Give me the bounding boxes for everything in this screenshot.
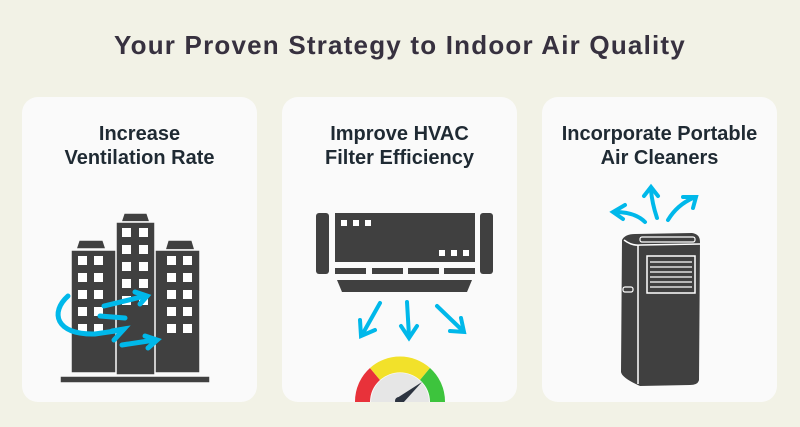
heading: ventilation: Increase xyxy=(99,123,180,145)
panel: portable air cleaners xyxy=(542,97,777,402)
heading: air cleaners xyxy=(562,123,757,169)
heading: air cleaners: Air Cleaners xyxy=(601,147,718,169)
panel: HVAC filter xyxy=(282,97,517,402)
heading: ventilation: Ventilation Rate xyxy=(64,147,215,169)
heading: air cleaners: Incorporate Portable xyxy=(562,123,757,145)
heading: HVAC: Filter Efficiency xyxy=(325,147,474,169)
panel: ventilation xyxy=(22,97,257,402)
heading: HVAC: Improve HVAC xyxy=(330,123,469,145)
heading: ventilation xyxy=(64,123,215,169)
icon: AC unit with arrows and gauge xyxy=(316,213,493,402)
icon: buildings with airflow arrows xyxy=(56,214,210,382)
heading: HVAC xyxy=(325,123,474,169)
title: Your Proven Strategy to Indoor Air Quality xyxy=(114,30,686,60)
icon: portable air cleaner xyxy=(609,184,700,386)
